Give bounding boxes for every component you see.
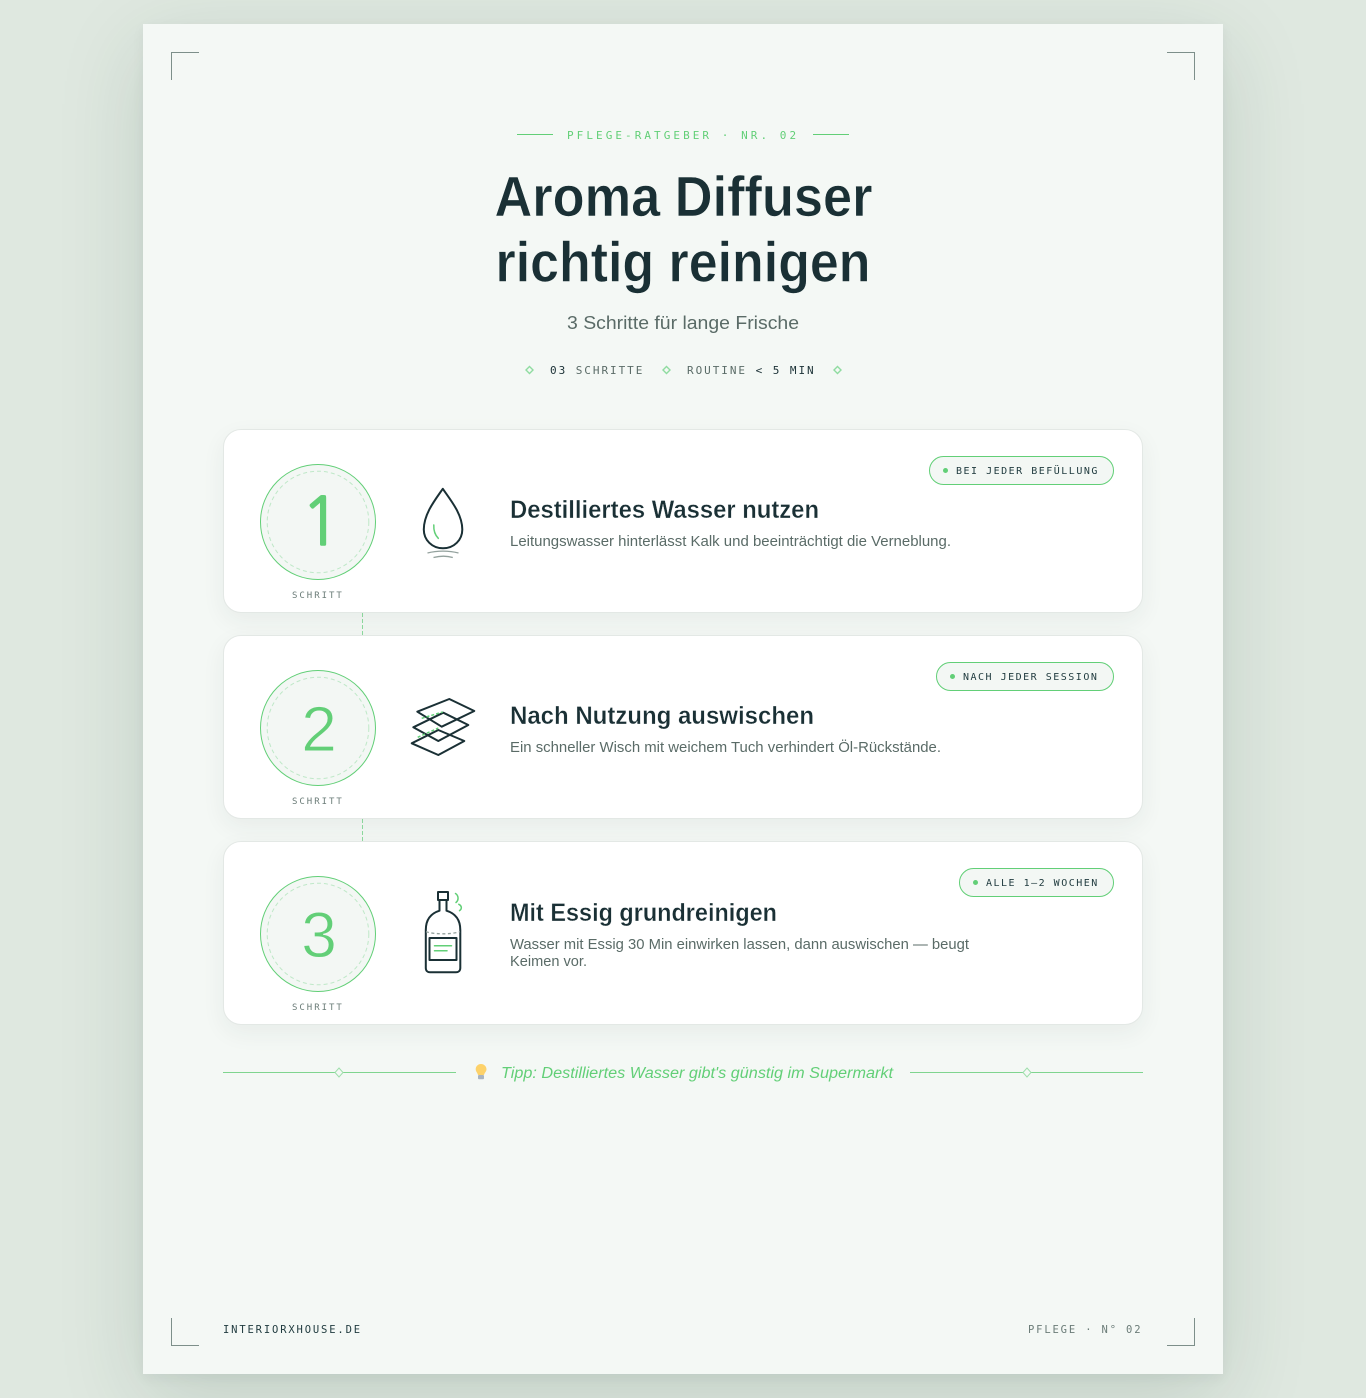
corner marks: [172, 52, 1194, 1346]
icon: cloth layers: [412, 699, 474, 755]
badge: ALLE 1–2 WOCHEN: [986, 878, 1099, 889]
badge: BEI JEDER BEFÜLLUNG: [956, 464, 1099, 477]
step number 2: SCHRITT: [292, 797, 344, 807]
step number 3: [260, 876, 376, 1013]
panel: step 2: [223, 635, 1143, 819]
icon: vinegar bottle: [426, 892, 461, 972]
description: [510, 937, 969, 970]
page sheet: [143, 24, 1223, 1374]
step number 1: SCHRITT: [292, 591, 344, 601]
title: [494, 165, 872, 294]
badge: NACH JEDER SESSION: [963, 672, 1098, 683]
badge: [960, 868, 1114, 896]
badge: [936, 662, 1114, 690]
heading: Destilliertes Wasser nutzen: [510, 496, 819, 524]
step number 3: SCHRITT: [292, 1003, 344, 1013]
step number 2: 2: [301, 693, 337, 765]
panel: step 3: [223, 841, 1143, 1025]
icon: light bulb: [476, 1064, 486, 1079]
meta row: [526, 364, 841, 377]
description: Leitungswasser hinterlässt Kalk und beeinträchtigt die Verneblung.: [510, 534, 951, 550]
connector 2: [362, 819, 364, 841]
connector 1: [362, 613, 364, 635]
heading: Nach Nutzung auswischen: [510, 702, 814, 730]
badge: [930, 456, 1114, 484]
tip row: Tipp: Destilliertes Wasser gibt's günstig im Supermarkt: [501, 1065, 894, 1082]
title: Aroma Diffuser: [494, 165, 872, 229]
title: richtig reinigen: [496, 230, 870, 294]
description: Wasser mit Essig 30 Min einwirken lassen, dann auswischen — beugt: [510, 937, 969, 953]
step number 1: 1: [301, 489, 341, 555]
panel: step 1: [223, 429, 1143, 613]
step number 1: [260, 464, 376, 601]
icon: water drop: [424, 489, 462, 558]
eyebrow: PFLEGE-RATGEBER · NR. 02: [567, 129, 799, 142]
step number 3: 3: [301, 899, 337, 971]
description: Keimen vor.: [510, 954, 587, 970]
meta row: 03 SCHRITTE: [550, 364, 644, 377]
meta row: ROUTINE < 5 MIN: [687, 364, 816, 377]
step number 2: [260, 670, 376, 807]
footer left: INTERIORXHOUSE.DE: [223, 1324, 362, 1336]
footer right: PFLEGE · N° 02: [1028, 1324, 1142, 1336]
description: Ein schneller Wisch mit weichem Tuch verhindert Öl-Rückstände.: [510, 738, 941, 756]
heading: Mit Essig grundreinigen: [510, 899, 777, 927]
subtitle: 3 Schritte für lange Frische: [567, 312, 799, 333]
tip row: [223, 1064, 1143, 1082]
